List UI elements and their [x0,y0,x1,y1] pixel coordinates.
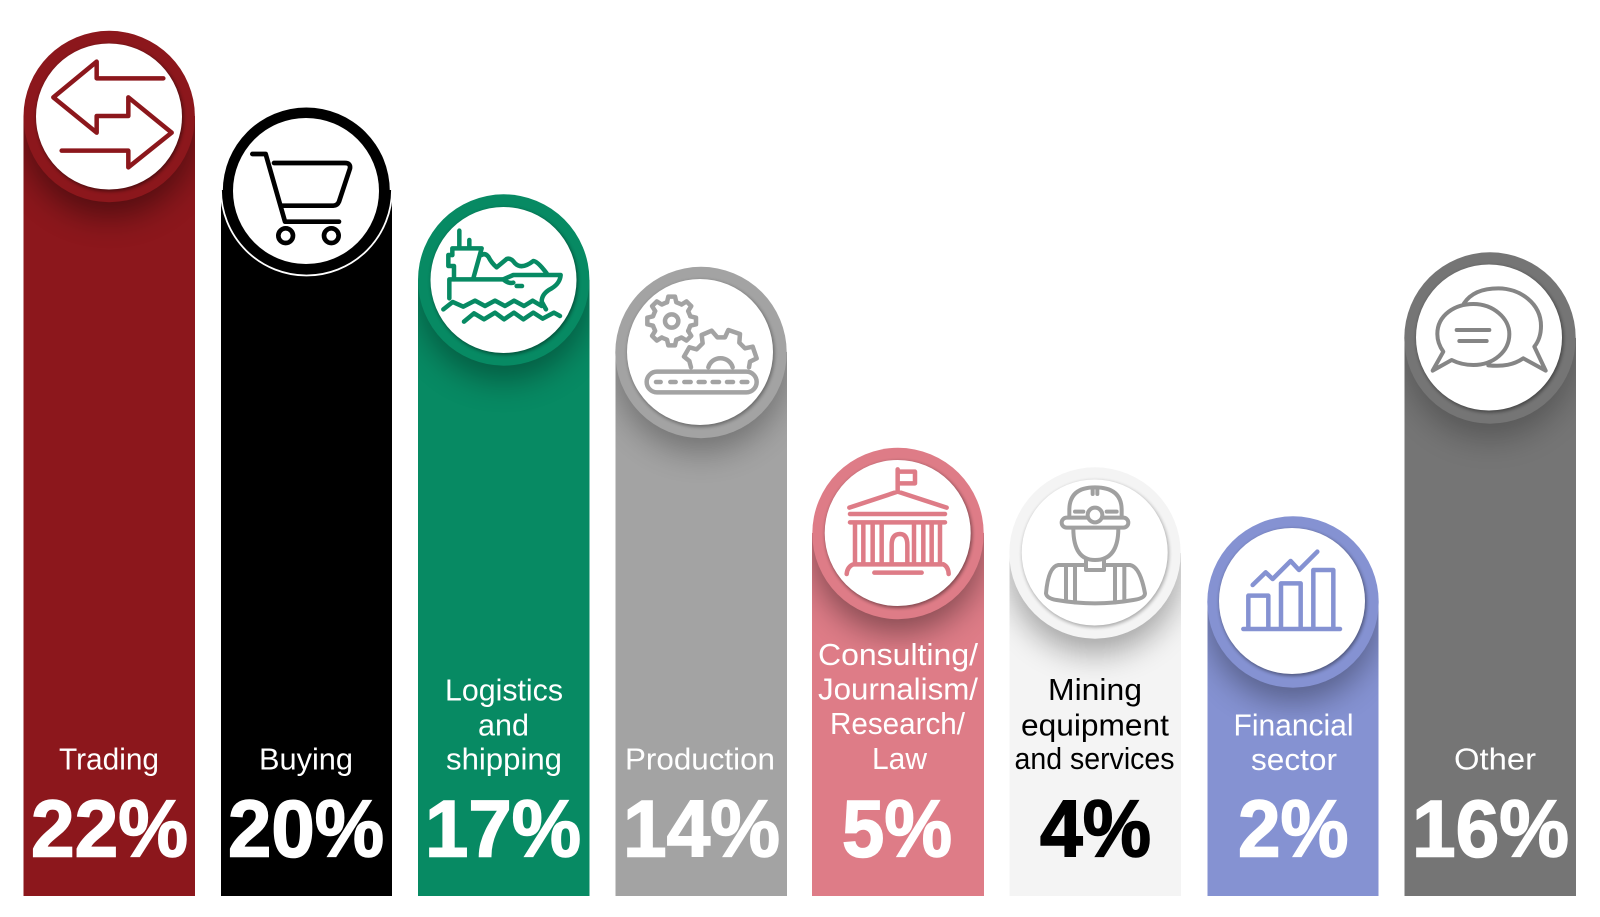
label: Financial sector: sector [1251,742,1337,777]
label: Financial sector [1234,708,1354,777]
label: Logistics and shipping: Logistics [445,672,563,708]
label: Logistics and shipping: and [478,708,529,742]
icon: miner with helmet [1046,487,1145,603]
bar: Buying 20% [221,108,392,896]
label: Logistics and shipping [445,672,563,776]
label: Financial sector: Financial [1234,708,1354,742]
bar: Consulting/Journalism/Research/Law 5% [812,448,984,896]
label: Logistics and shipping: shipping [446,742,562,776]
label: Buying: Buying [259,742,353,776]
bar: Trading 22% [24,31,195,896]
bar: Production 14% [615,267,787,896]
icon: speech bubbles [1433,288,1546,371]
label: Mining equipment and services [1014,672,1174,776]
label: Other: Other [1454,742,1536,776]
icon: two opposing arrows [53,62,172,167]
value: 2%: 2% [1238,784,1348,874]
icon: shopping cart [252,154,350,243]
value: 14%: 14% [623,784,780,874]
icon: gears and conveyor belt [647,297,757,392]
label: Mining equipment and services: equipment [1021,708,1169,742]
bar: Mining equipment and services 4% [1009,467,1181,896]
value: 22%: 22% [31,784,188,874]
value: 17%: 17% [425,784,581,874]
bar: Other 16% [1404,252,1576,896]
label: Mining equipment and services: and services [1014,741,1174,776]
value: 4%: 4% [1040,784,1151,874]
label: Consulting / Journalism / Research / Law: Research/ [830,706,965,741]
label: Consulting / Journalism / Research / Law: Law [872,741,928,776]
value: 20%: 20% [228,784,384,874]
label: Consulting / Journalism / Research / Law: Journalism/ [818,672,978,706]
label: Mining equipment and services: Mining [1048,672,1142,707]
label: Production: Production [625,742,775,776]
icon: cargo ship [443,231,561,322]
icon: bar chart with rising line [1243,552,1340,629]
icon: institution building with flag [847,469,949,574]
bar: Logistics and shipping 17% [418,194,590,896]
label: Trading: Trading [59,742,159,776]
value: 16%: 16% [1412,784,1569,874]
value: 5%: 5% [842,784,952,874]
label: Consulting / Journalism / Research / Law [818,637,978,776]
bar: Financial sector 2% [1207,516,1379,896]
label: Consulting / Journalism / Research / Law: Consulting/ [818,637,978,672]
